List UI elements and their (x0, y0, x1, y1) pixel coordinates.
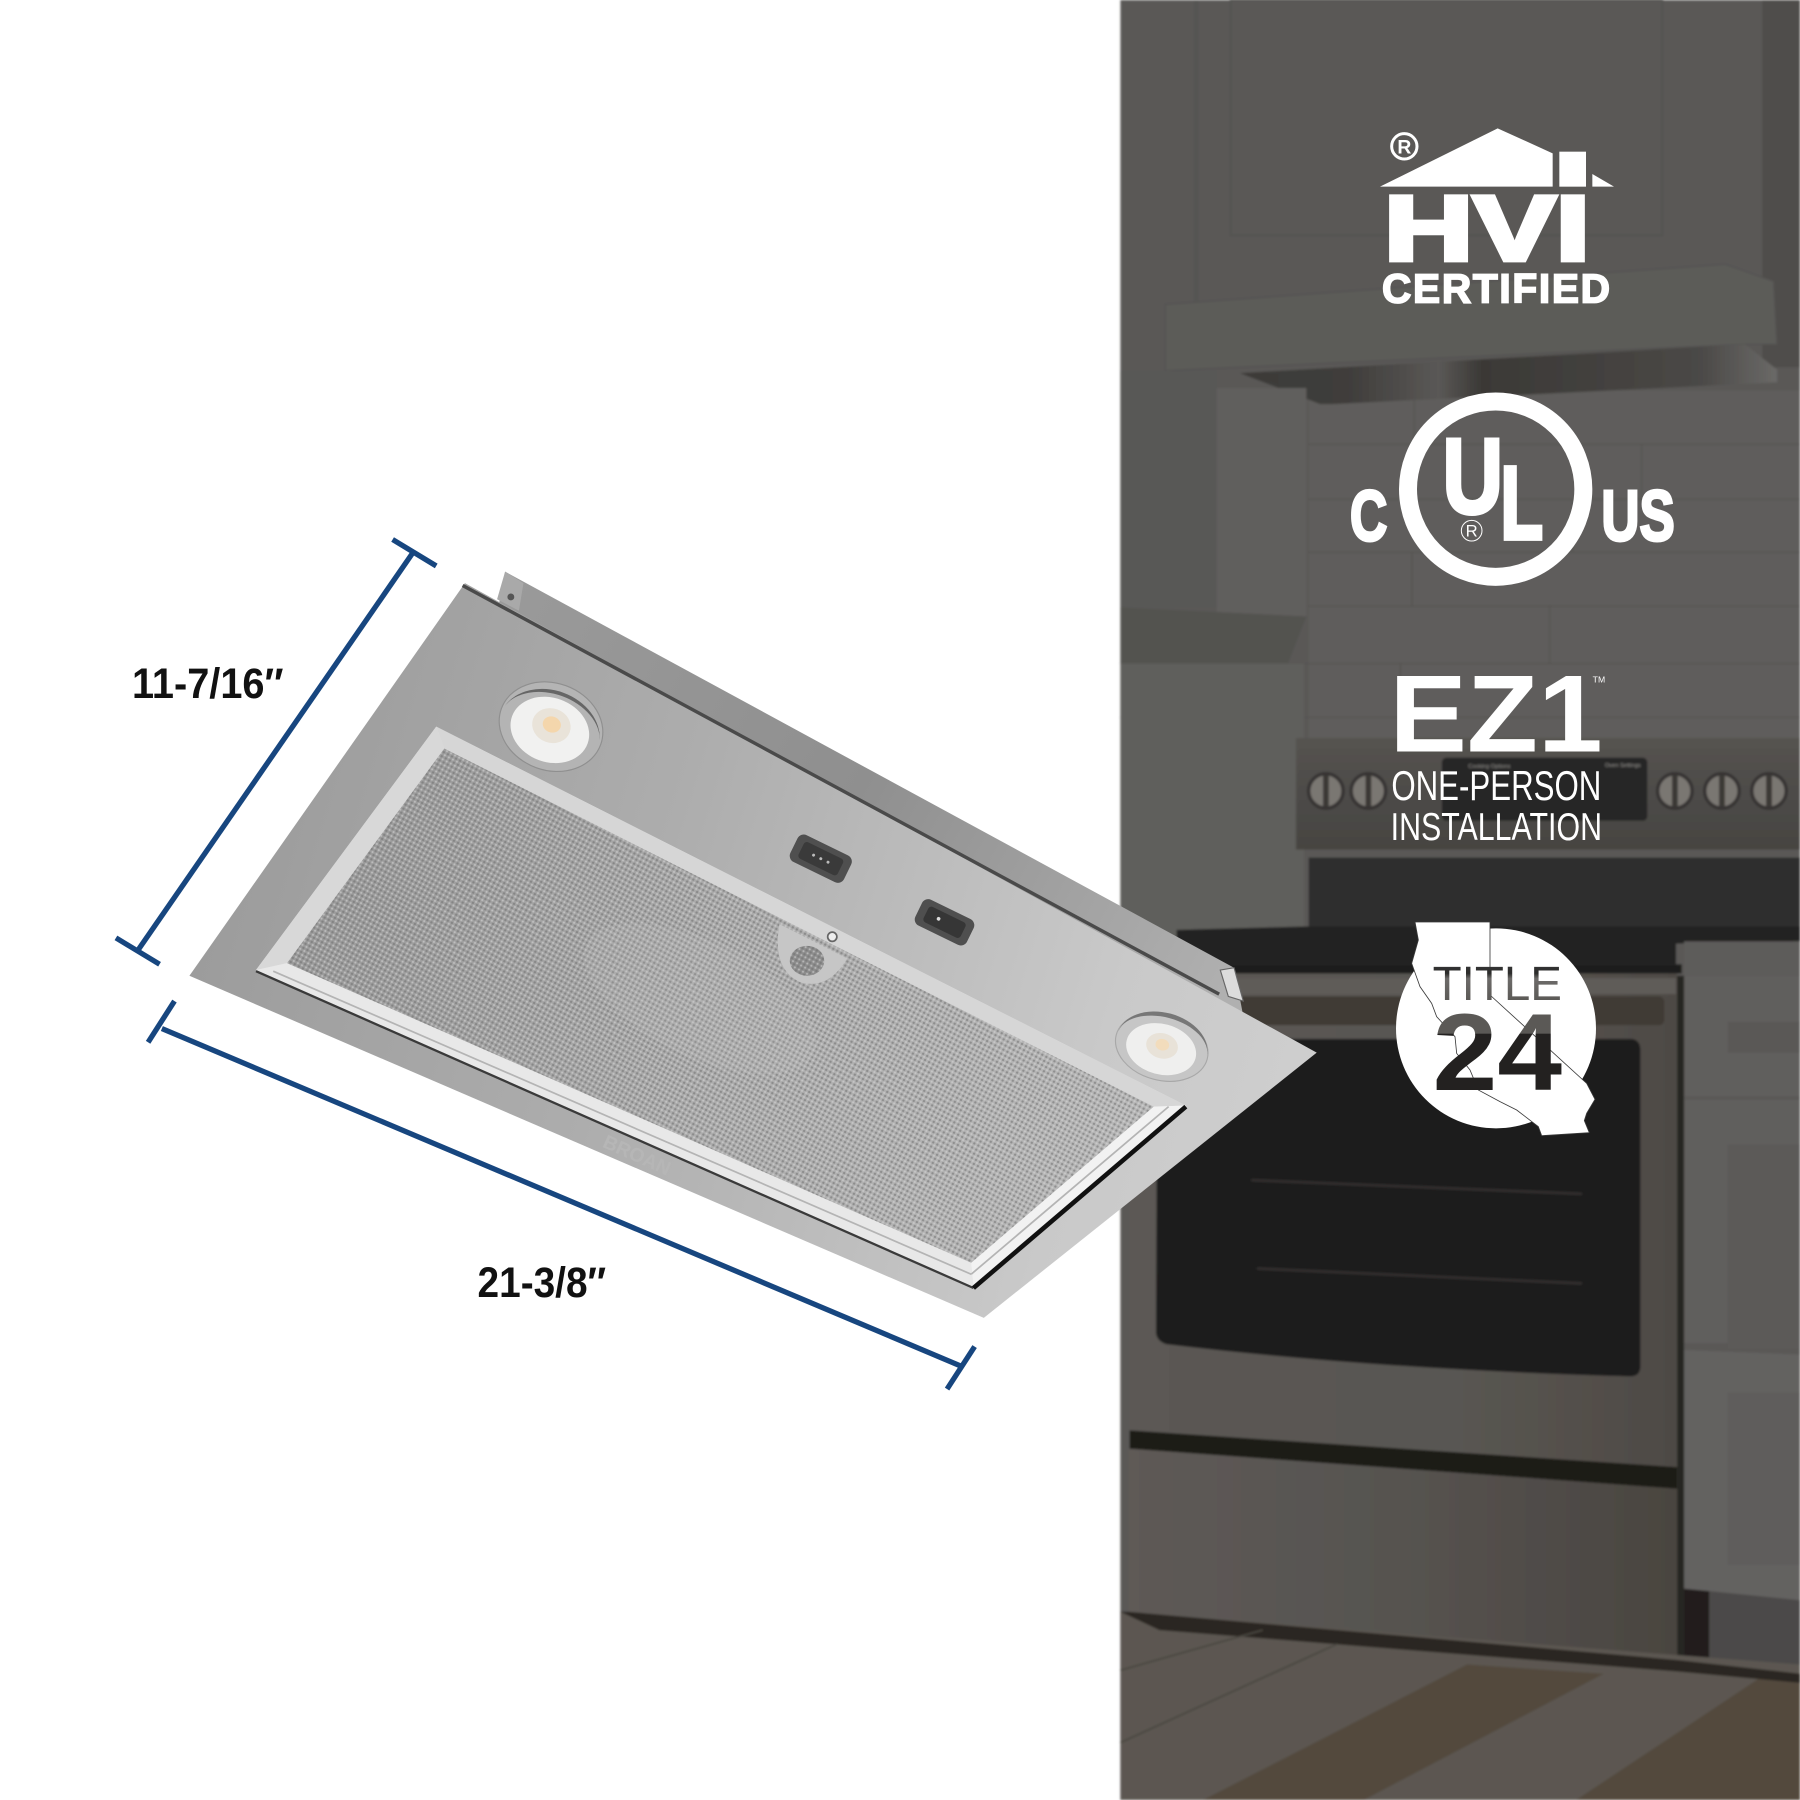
fan switch (787, 832, 854, 885)
logo: cULus (1350, 401, 1675, 577)
right light (1108, 1001, 1216, 1091)
left light (486, 668, 616, 786)
certified wordmark: CERTIFIED (1382, 265, 1610, 311)
faceplate upper dark edge (463, 585, 1219, 994)
dimension: depth 11-7/16 inches (116, 540, 436, 964)
light switch (912, 897, 977, 948)
panel: darkened kitchen photo (1120, 0, 1800, 1800)
ring (1408, 401, 1583, 577)
depth label: 11-7/16″ (132, 660, 284, 707)
brand mark: BROAN (600, 1131, 674, 1180)
logo: EZ1 one-person installation (1389, 653, 1605, 849)
house roof and chimney (1380, 128, 1614, 187)
panel: darkened kitchen photo: Oven Settings (1605, 763, 1641, 769)
California outline (1412, 922, 1595, 1136)
filter frame (256, 727, 1186, 1288)
white circle (1396, 928, 1596, 1128)
registered mark (1392, 134, 1417, 159)
title text: TITLE (1433, 957, 1562, 1011)
trademark: TM (1593, 675, 1605, 685)
us letters: US (1601, 477, 1675, 557)
filter pull tab (778, 924, 847, 984)
hood faceplate (189, 583, 1317, 1318)
HVI wordmark: HVI (1384, 178, 1590, 280)
U letter: U (1443, 416, 1503, 536)
grease filter mesh (287, 748, 1154, 1263)
one-person: ONE-PERSON (1391, 763, 1601, 809)
panel: white product background (0, 0, 1120, 1800)
installation: INSTALLATION (1391, 806, 1602, 849)
depth dimension line (116, 540, 436, 964)
number 24: 24 (1433, 992, 1562, 1114)
width dimension line (148, 1001, 975, 1389)
dimension: width 21-3/8 inches (148, 1001, 975, 1389)
logo: California Title 24 (1396, 922, 1596, 1136)
registered mark: R (1466, 522, 1478, 541)
registered mark: R (1397, 137, 1411, 158)
product: range hood insert (189, 572, 1317, 1318)
EZ1 wordmark: EZ1 (1389, 653, 1603, 776)
registered mark (1461, 520, 1482, 541)
width label: 21-3/8″ (478, 1259, 606, 1306)
panel: darkened kitchen photo: Cooking Options (1468, 764, 1511, 770)
L letter: L (1501, 444, 1543, 560)
logo: HVI certified (1380, 128, 1614, 311)
c letter: C (1350, 477, 1387, 557)
hood rear housing (497, 572, 1243, 1016)
